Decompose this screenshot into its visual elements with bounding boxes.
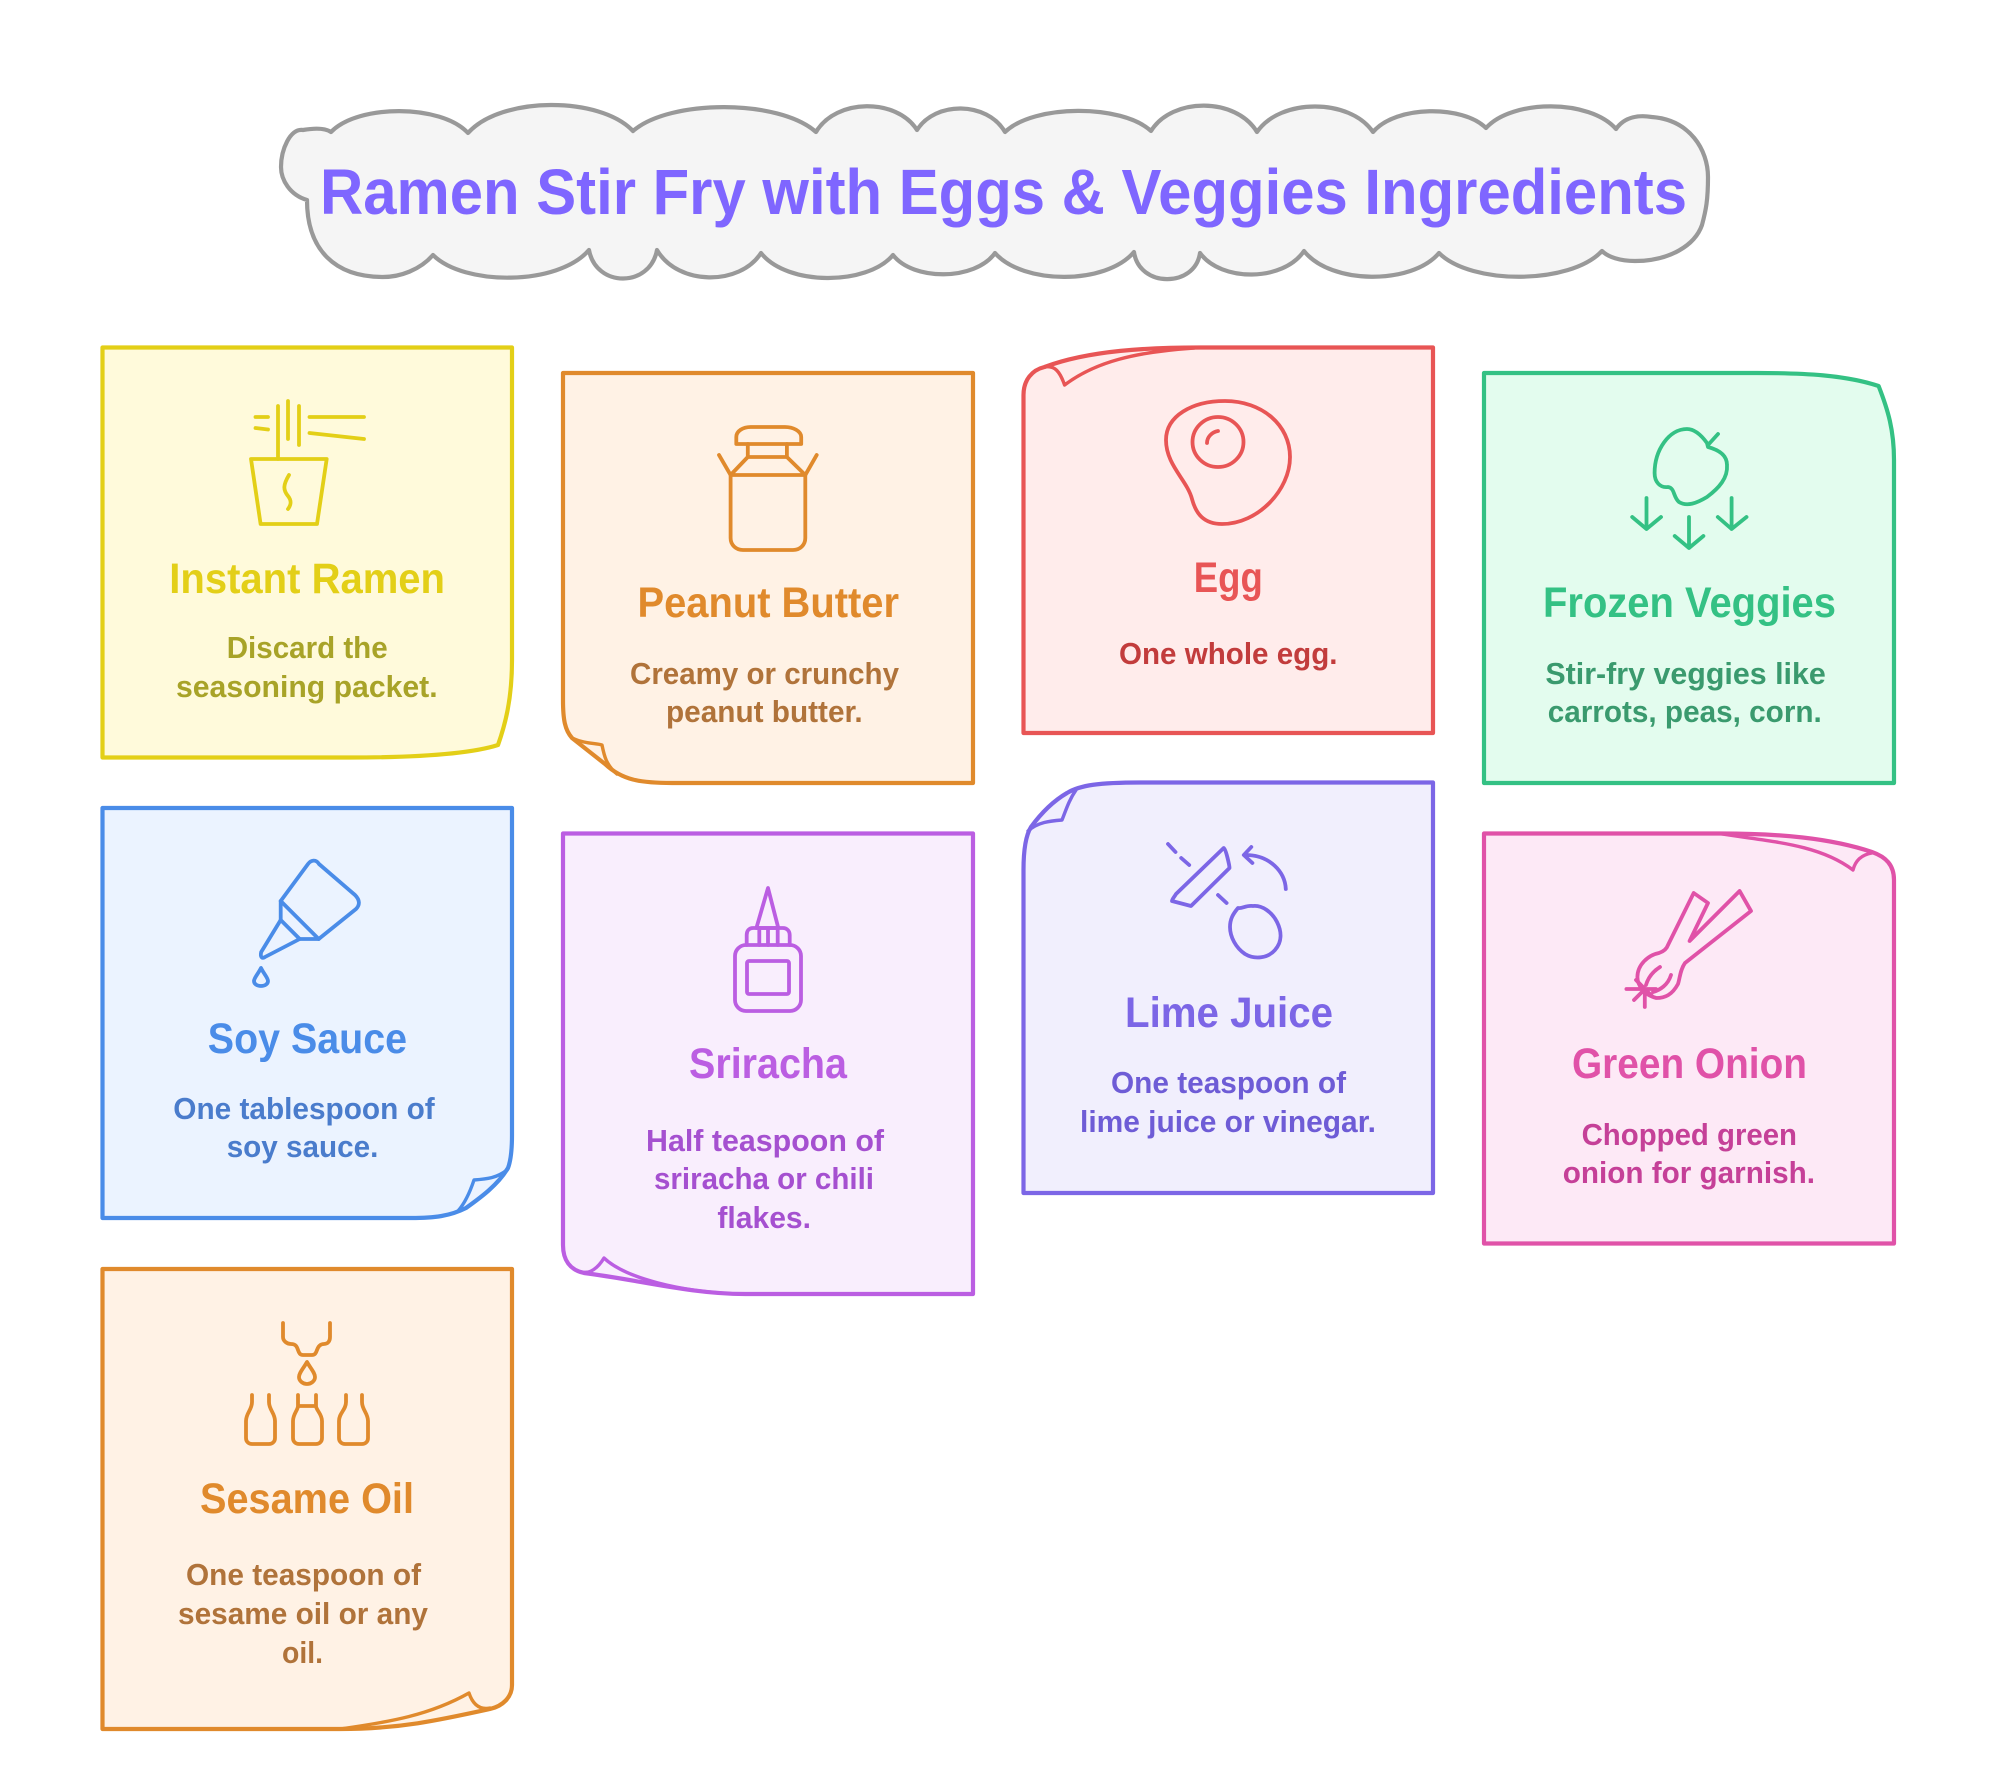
description: seasoning packet. xyxy=(176,669,438,704)
icon: oil drop and bottles xyxy=(246,1323,368,1444)
page curl xyxy=(572,738,617,774)
icon: jar xyxy=(719,427,817,550)
icon: lime and knife xyxy=(1168,844,1286,957)
card shape xyxy=(563,834,973,1294)
description: Half teaspoon of xyxy=(646,1123,885,1158)
page curl xyxy=(1722,834,1872,870)
description xyxy=(178,1557,429,1670)
heading: Lime Juice xyxy=(1125,989,1333,1037)
page curl xyxy=(458,1170,507,1211)
panel: Frozen Veggies xyxy=(1484,373,1894,783)
description xyxy=(630,656,900,729)
description xyxy=(176,630,438,704)
page curl xyxy=(1044,348,1194,385)
card shape xyxy=(1484,834,1894,1244)
icon: sauce bottle xyxy=(735,888,801,1011)
description xyxy=(1545,656,1826,729)
description: Creamy or crunchy xyxy=(630,656,900,691)
description xyxy=(1080,1065,1376,1139)
page curl xyxy=(340,1693,490,1729)
title cloud shape xyxy=(281,105,1708,279)
card shape xyxy=(1484,373,1894,783)
description: One teaspoon of xyxy=(186,1557,422,1592)
description: sesame oil or any xyxy=(178,1596,429,1631)
description: sriracha or chili xyxy=(654,1161,874,1196)
description: lime juice or vinegar. xyxy=(1080,1104,1376,1139)
card shape xyxy=(1024,348,1433,733)
page curl xyxy=(1028,790,1076,831)
icon: noodle cup with chopsticks xyxy=(251,401,364,524)
description: peanut butter. xyxy=(666,694,863,729)
description: One tablespoon of xyxy=(173,1091,435,1126)
page curl xyxy=(582,1258,739,1294)
heading: Instant Ramen xyxy=(169,555,445,603)
icon: vegetable with falling arrows xyxy=(1632,429,1746,548)
heading: Frozen Veggies xyxy=(1543,579,1836,627)
card shape xyxy=(563,373,973,783)
heading: Sesame Oil xyxy=(200,1475,414,1523)
heading: Peanut Butter xyxy=(638,579,899,627)
heading: Soy Sauce xyxy=(208,1015,407,1063)
panel: Sriracha xyxy=(563,834,973,1294)
description: Discard the xyxy=(227,630,388,665)
panel: Soy Sauce xyxy=(102,808,512,1218)
description xyxy=(646,1123,885,1235)
icon: green onion xyxy=(1626,891,1751,1007)
description xyxy=(173,1091,435,1164)
description: One teaspoon of xyxy=(1111,1065,1347,1100)
panel: Green Onion xyxy=(1484,834,1894,1244)
description: oil. xyxy=(282,1635,323,1670)
description: One whole egg. xyxy=(1119,636,1338,671)
description: carrots, peas, corn. xyxy=(1548,694,1822,729)
description: soy sauce. xyxy=(227,1129,378,1164)
panel: Lime Juice xyxy=(1024,782,1433,1193)
title banner xyxy=(281,105,1708,279)
description: Chopped green xyxy=(1582,1117,1797,1152)
card shape xyxy=(102,1269,512,1729)
panel: Sesame Oil xyxy=(102,1269,512,1729)
card shape xyxy=(102,348,512,758)
heading: Egg xyxy=(1194,554,1263,602)
heading: Green Onion xyxy=(1572,1040,1807,1088)
description: Stir-fry veggies like xyxy=(1545,656,1826,691)
heading: Sriracha xyxy=(689,1040,848,1088)
description: flakes. xyxy=(717,1200,811,1235)
card shape xyxy=(1024,782,1433,1193)
panel: Peanut Butter xyxy=(563,373,973,783)
panel: Egg xyxy=(1024,348,1433,733)
icon: soy sauce bottle xyxy=(254,861,359,986)
title: Ramen Stir Fry with Eggs & Veggies Ingredients xyxy=(320,156,1687,228)
description xyxy=(1563,1117,1815,1190)
card shape xyxy=(102,808,512,1218)
icon: fried egg xyxy=(1166,401,1290,524)
description: onion for garnish. xyxy=(1563,1155,1815,1190)
panel: Instant Ramen xyxy=(102,348,512,758)
